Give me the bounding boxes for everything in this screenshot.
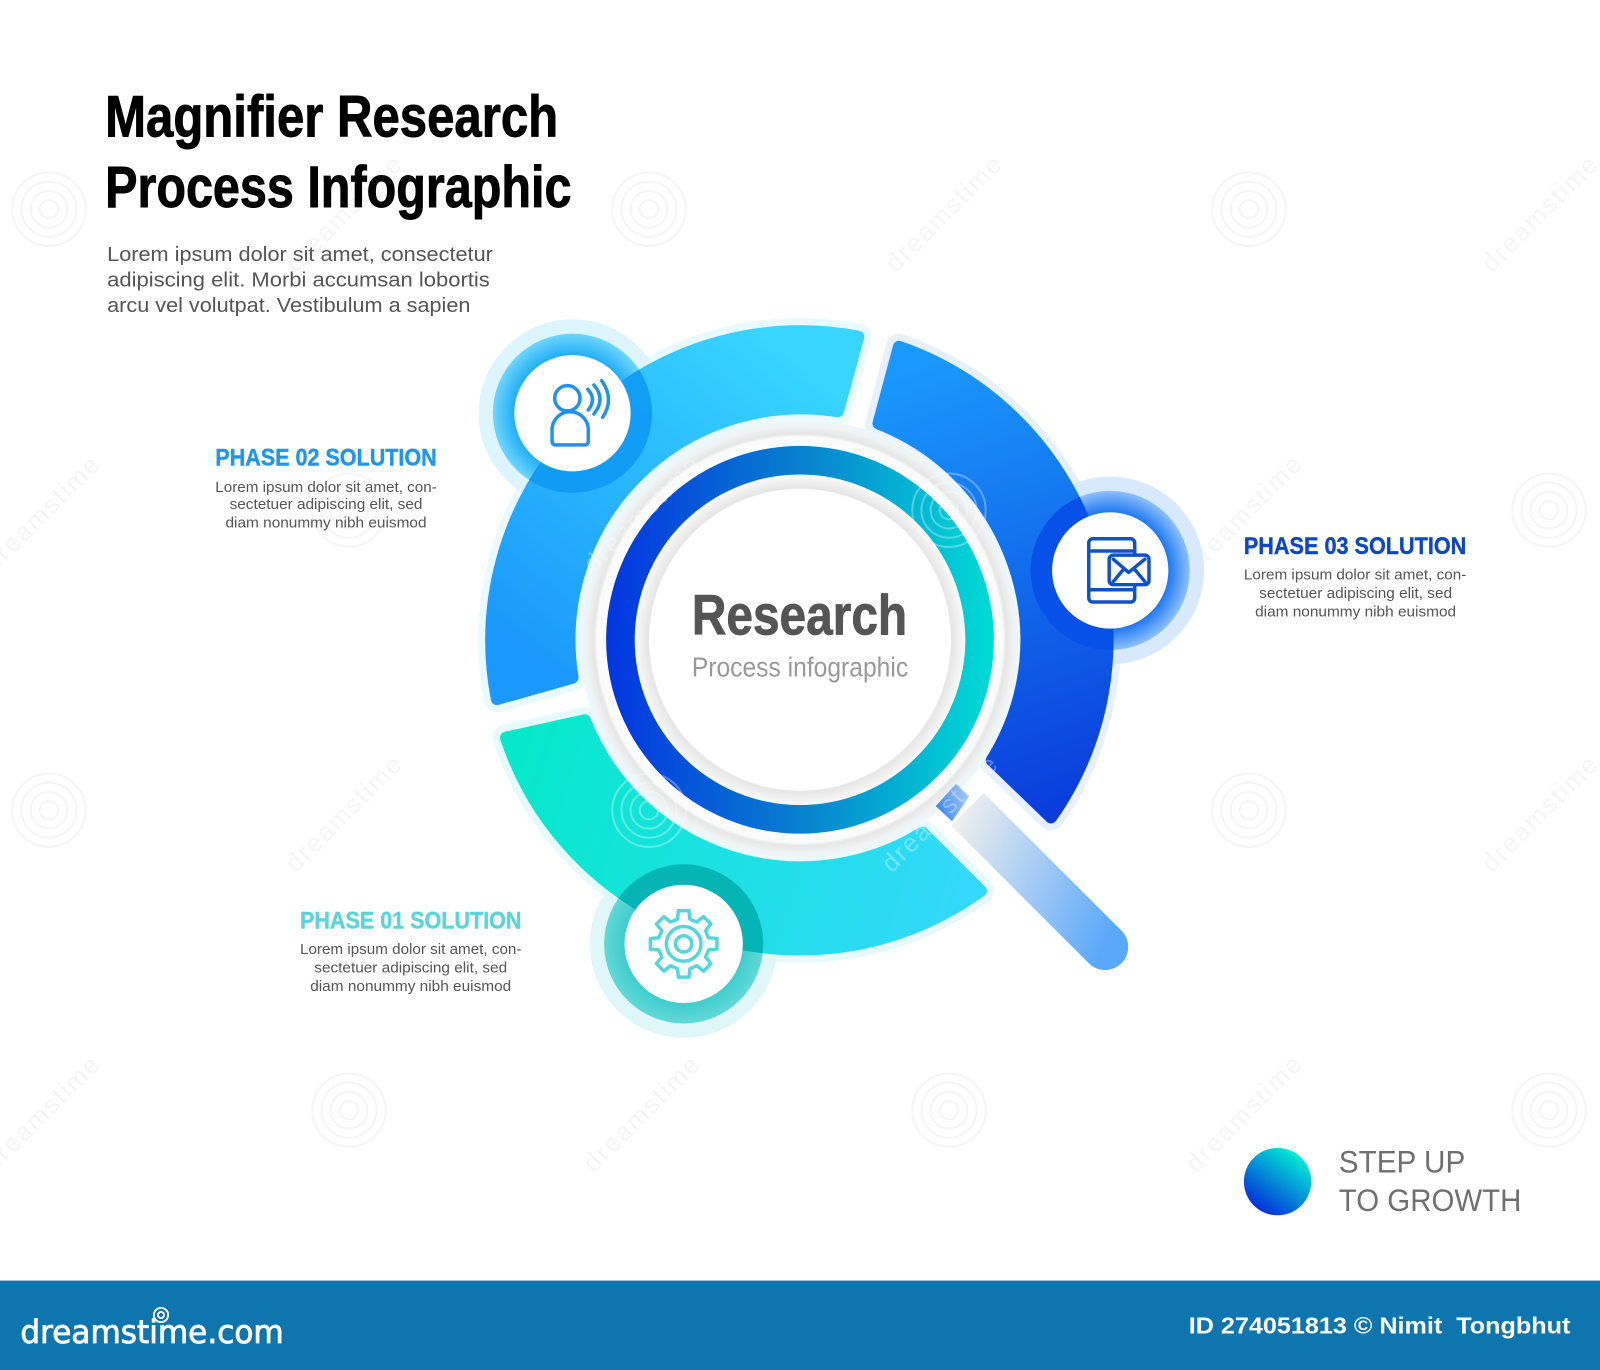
watermark over chart — [578, 449, 1005, 878]
label: phase 02 — [215, 444, 437, 532]
label: phase 03: diam nonummy nibh euismod — [1255, 604, 1456, 620]
label: phase 02: diam nonummy nibh euismod — [226, 516, 427, 532]
label: phase 01: Lorem ipsum dolor sit amet, con- — [300, 942, 522, 958]
title: Process Infographic — [105, 155, 571, 220]
label: phase 02: sectetuer adipiscing elit, sed — [230, 497, 422, 513]
watermark pattern: dreamstime — [1180, 449, 1309, 578]
ring overlays on segments — [529, 370, 1114, 954]
intro text: adipiscing elit. Morbi accumsan lobortis — [107, 270, 490, 292]
footer logo: dreamstime.com — [20, 1315, 284, 1351]
label: phase 03: Lorem ipsum dolor sit amet, con- — [1244, 568, 1466, 584]
intro text — [107, 244, 493, 317]
magnifier lens — [580, 419, 1020, 860]
center heading: Research — [692, 584, 907, 647]
phase ring halos behind segments — [479, 319, 1204, 1038]
brand text: TO GROWTH — [1339, 1182, 1521, 1218]
label: phase 03 — [1244, 533, 1466, 620]
segment: phase 02 — [491, 331, 858, 699]
watermark over chart: dreamstime — [876, 749, 1005, 878]
footer credit: ID 274051813 © Nimit Tongbhut — [1189, 1313, 1571, 1339]
center heading — [692, 584, 908, 683]
intro text: Lorem ipsum dolor sit amet, consectetur — [107, 244, 493, 266]
watermark pattern: dreamstime — [280, 749, 409, 878]
icon: phone with envelope — [1052, 512, 1168, 629]
label: phase 03: sectetuer adipiscing elit, sed — [1259, 586, 1452, 602]
segment: phase 03 — [879, 347, 1107, 817]
watermark pattern: dreamstime — [578, 1049, 707, 1178]
segment glow halos — [491, 331, 1107, 949]
intro text: arcu vel volutpat. Vestibulum a sapien — [107, 295, 470, 317]
title — [105, 85, 571, 220]
watermark pattern: dreamstime — [1180, 1049, 1309, 1178]
title: Magnifier Research — [105, 85, 558, 150]
watermark over chart: dreamstime — [578, 449, 707, 578]
label: phase 01: PHASE 01 SOLUTION — [300, 908, 521, 935]
label: phase 01 — [300, 908, 522, 995]
brand text — [1339, 1143, 1521, 1218]
icon: person with sound waves — [514, 355, 631, 471]
label: phase 03: PHASE 03 SOLUTION — [1244, 533, 1466, 560]
magnifier connector — [936, 784, 969, 821]
watermark pattern: dreamstime — [880, 149, 1009, 278]
segment: phase 01 — [506, 720, 981, 949]
center heading: Process infographic — [692, 652, 908, 683]
brand mark: gradient ball — [1244, 1148, 1311, 1215]
brand text: STEP UP — [1339, 1143, 1465, 1179]
label: phase 01: sectetuer adipiscing elit, sed — [314, 960, 507, 976]
footer bar — [0, 1281, 1600, 1370]
watermark pattern — [0, 149, 1600, 1178]
label: phase 02: Lorem ipsum dolor sit amet, con- — [215, 480, 437, 496]
magnifier handle — [951, 793, 1128, 970]
icon: gear — [624, 885, 743, 1003]
label: phase 01: diam nonummy nibh euismod — [310, 979, 511, 995]
watermark pattern: dreamstime — [280, 149, 409, 278]
label: phase 02: PHASE 02 SOLUTION — [215, 444, 437, 471]
